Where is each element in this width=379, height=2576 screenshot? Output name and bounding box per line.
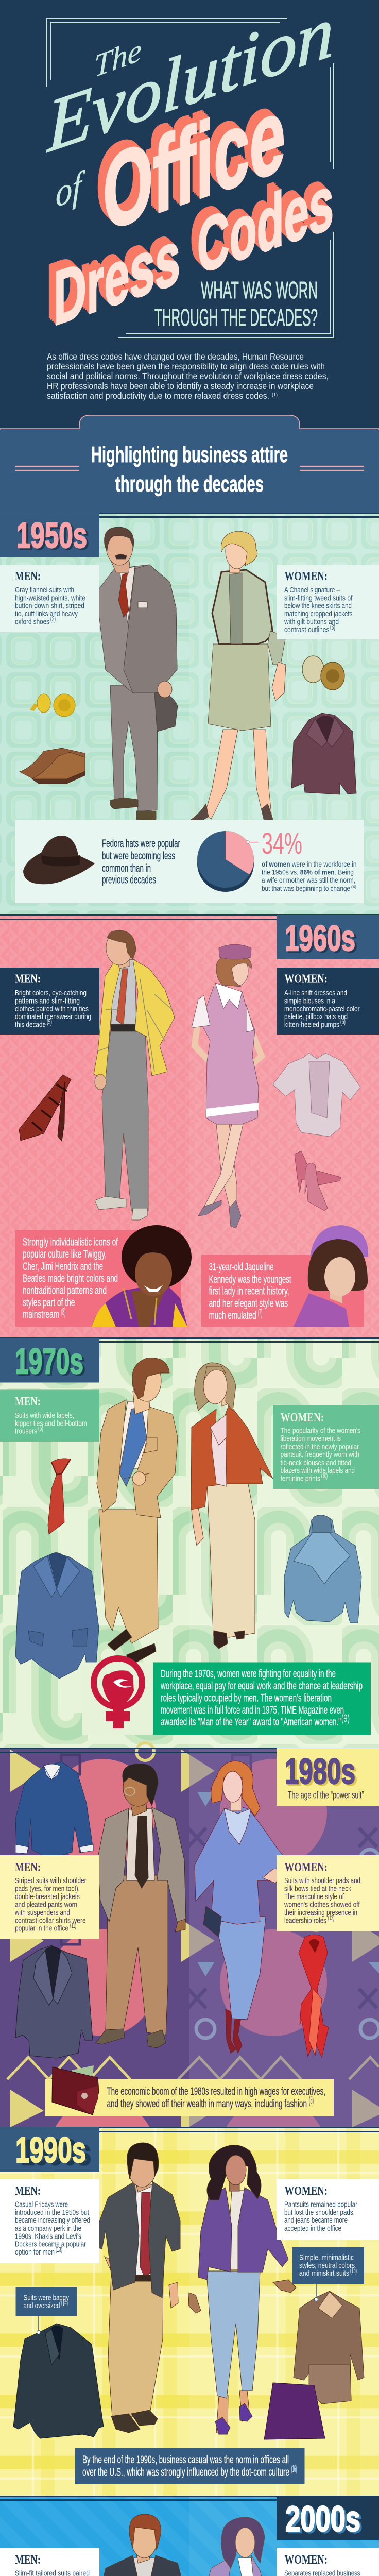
text: pop culture icons: mainstream — [23, 1309, 59, 1320]
intro paragraph: satisfaction and productivity due to more relaxed dress codes. — [47, 391, 269, 401]
text: men description: introduced in the 1950s but — [15, 2209, 89, 2217]
text: fedora note: previous decades — [102, 874, 156, 886]
callout: baggy suits — [15, 2287, 77, 2331]
text: men description: and pleated pants worn — [15, 1901, 77, 1909]
text: women description: feminine prints — [281, 1475, 320, 1483]
text: Jacqueline Kennedy: first lady in recent history, — [209, 1285, 289, 1297]
title: Dress — [46, 206, 180, 342]
text: men description: became increasingly offered — [15, 2216, 90, 2225]
text: women description: leadership roles — [284, 1917, 326, 1925]
heading: women: WOMEN: — [284, 1861, 328, 1874]
panel: economic boom callout — [45, 2065, 334, 2116]
text: women's liberation: (9) — [341, 1713, 350, 1724]
section: 2000s — [0, 2496, 379, 2576]
panel: women 1960s — [277, 968, 379, 1035]
text: men description: this decade — [15, 1021, 46, 1029]
text: Jacqueline Kennedy: (7) — [258, 1307, 262, 1319]
icon: chanel buttons — [302, 656, 344, 690]
text: Jacqueline Kennedy: much emulated — [209, 1310, 256, 1321]
text: women description: palette, pillbox hats and — [284, 1013, 348, 1021]
heading: highlighting — [91, 442, 288, 497]
decade label 1950s — [0, 513, 99, 557]
intro paragraph — [47, 351, 329, 401]
text: women description: blazers with wide lapels and — [281, 1467, 355, 1475]
figure: 1960s man — [94, 930, 175, 1220]
text: men description: option for men — [15, 2248, 55, 2257]
icon: white blouse — [273, 1053, 360, 1137]
text: women description: with gilt buttons and — [284, 618, 339, 626]
text: women description: liberation movement is — [281, 1435, 341, 1443]
icon: purple jacket — [291, 713, 356, 794]
text: men description: (13) — [56, 2246, 62, 2254]
icon: striped tie — [19, 1075, 71, 1141]
text: men description: Striped suits with shoulder — [15, 1877, 87, 1885]
section: 1960s — [0, 914, 379, 1338]
subtitle — [154, 277, 318, 331]
title: The Evolution of: of — [56, 162, 85, 216]
text: women description: The masculine style of — [284, 1893, 344, 1901]
heading: women: WOMEN: — [284, 2184, 328, 2198]
panel: men 1990s — [0, 2179, 99, 2263]
text: women description: matching cropped jackets — [284, 610, 352, 618]
text: men description: Casual Fridays were — [15, 2201, 68, 2209]
title: Dress: Dress — [53, 212, 179, 341]
text: men description — [15, 586, 85, 626]
text: women description: A Chanel signature – — [284, 586, 340, 595]
text: men description: Gray flannel suits with — [15, 586, 74, 595]
text: men description: as a company perk in the — [15, 2225, 81, 2233]
title: Dress: Dress — [48, 208, 175, 336]
title: Codes — [190, 151, 334, 291]
figure: 1980s man — [96, 1764, 186, 2048]
decade label 1990s: 1990s — [21, 2132, 91, 2173]
text: men description — [15, 2201, 90, 2257]
panel: men 1970s — [0, 1390, 99, 1442]
heading: men: MEN: — [15, 2553, 41, 2567]
text: women description — [281, 1427, 360, 1483]
title: Dress: Dress — [54, 213, 180, 342]
text: women description — [284, 989, 360, 1029]
decade label 1950s: 1950s — [16, 515, 87, 555]
text: women description — [284, 1877, 360, 1925]
panel: pop culture icons — [15, 1225, 192, 1327]
text: Jacqueline Kennedy — [209, 1261, 291, 1321]
text: women description: and jeans became more — [284, 2216, 348, 2225]
figure: 2000s woman — [198, 2517, 273, 2576]
callout: minimalist styles: and miniskirt suits — [299, 2269, 349, 2278]
decade label 1970s: 1970s — [15, 1341, 83, 1381]
heading: women: WOMEN: — [284, 570, 328, 583]
callout: baggy suits: Suits were baggy — [24, 2294, 70, 2302]
panel: men 1950s — [0, 565, 99, 632]
text: pop culture icons: Beatles made bright colors and — [23, 1273, 118, 1284]
text: economic boom: (8) — [309, 2095, 314, 2107]
icon: blue tie-neck blouse — [284, 1515, 361, 1623]
text: men description: clothes paired with thin ties — [15, 1005, 89, 1013]
text: men description: Dockers became a popular — [15, 2241, 86, 2249]
text: men description: pads (yes, for men too!), — [15, 1885, 80, 1893]
text: fedora note — [102, 838, 180, 886]
text: women description: (6) — [340, 1018, 346, 1026]
figure: 1950s man — [96, 527, 178, 823]
portrait: Jackie Kennedy — [294, 1225, 368, 1327]
icon: cufflinks — [30, 694, 75, 717]
text: men description: contrast-collar shirts were — [15, 1917, 86, 1925]
title: The Evolution of: The — [94, 31, 142, 84]
text: women description: Pantsuits remained popular — [284, 2201, 357, 2209]
panel: women 1980s — [277, 1855, 379, 1931]
callout: minimalist styles: Simple, minimalistic — [299, 2254, 354, 2262]
text: women description: their increasing presence in — [284, 1909, 357, 1917]
text: women workforce: a wife or mother was still the norm, — [262, 876, 355, 884]
heading: men: MEN: — [15, 570, 41, 583]
text: women description: accepted in the office — [284, 2225, 341, 2233]
icon: brogue shoes — [20, 748, 85, 784]
heading: men: MEN: — [15, 1861, 41, 1874]
text: men description: (5) — [47, 1018, 52, 1026]
section: 1990s — [0, 2127, 379, 2496]
panel: women 1990s — [277, 2179, 379, 2240]
icon: wallet — [52, 2065, 99, 2115]
icon: blue shirt — [15, 1762, 93, 1859]
panel: highlighting band — [0, 415, 379, 513]
panel: fedora and workforce facts — [15, 820, 364, 903]
text: men description: (2) — [50, 615, 56, 623]
figure: 1970s man — [97, 1358, 178, 1663]
panel: women's liberation callout — [82, 1658, 371, 1735]
text: women description: reflected in the newly popular — [281, 1443, 359, 1451]
text: men description: high-waisted paints, white — [15, 595, 85, 603]
heading: women: WOMEN: — [284, 973, 328, 986]
text: women description: (10) — [321, 1472, 328, 1480]
text: women description: women's clothes showed off — [284, 1901, 360, 1909]
heading: highlighting: through the decades — [115, 471, 264, 497]
text: economic boom — [107, 2086, 325, 2110]
text: fedora note: common than in — [102, 862, 151, 874]
text: pop culture icons: Cher, Jimi Hendrix and the — [23, 1261, 103, 1273]
heading: women: WOMEN: — [284, 2553, 328, 2567]
decade label 1950s: 1950s — [19, 517, 89, 557]
text: women's liberation — [160, 1668, 363, 1728]
text: men description — [15, 989, 91, 1029]
text: men description: trousers — [15, 1427, 37, 1435]
text: pop culture icons: nontraditional patterns and — [23, 1285, 107, 1297]
callout: baggy suits: and oversized — [24, 2302, 60, 2310]
icon: red kipper tie — [48, 1459, 71, 1534]
figure: 1960s woman — [192, 944, 262, 1228]
text: women workforce: of women were in the workforce in — [262, 860, 356, 868]
heading: men: MEN: — [15, 1395, 41, 1409]
text: women description: The popularity of the women's — [281, 1427, 360, 1435]
text: men description: Suits with wide lapels, — [15, 1412, 74, 1420]
icon: blue jacket — [15, 1553, 99, 1679]
text: Jacqueline Kennedy: Kennedy was the youngest — [209, 1274, 291, 1285]
text: women description: (3) — [330, 623, 335, 632]
text: men description: 1990s. Khakis and Levi's — [15, 2233, 81, 2241]
text: women workforce: the 1950s vs. 86% of men. Being — [262, 868, 354, 876]
panel: men 2000s — [0, 2548, 99, 2576]
text: men description: (5) — [38, 1425, 43, 1433]
text: women description: tie-neck blouses and fitted — [281, 1459, 351, 1467]
figure: 1990s woman — [188, 2145, 296, 2434]
heading: men: MEN: — [15, 2184, 41, 2198]
title: Dress: Dress — [49, 209, 176, 338]
heading: women: WOMEN: — [281, 1411, 324, 1425]
text: men description: double-breasted jackets — [15, 1893, 80, 1901]
figure: 1950s woman — [184, 531, 286, 823]
panel: business casual callout — [75, 2448, 305, 2484]
icon: brown skirt suit — [294, 2291, 364, 2404]
text: women description: kitten-heeled pumps — [284, 1021, 339, 1029]
text: women workforce: but that was beginning to change — [262, 884, 350, 892]
portrait: Jimi Hendrix — [92, 1225, 192, 1327]
icon: plaid double-breasted jacket — [15, 1945, 93, 2058]
text: women description: Suits with shoulder pads and — [284, 1877, 360, 1885]
text: Jacqueline Kennedy: and her elegant style was — [209, 1297, 288, 1310]
text: fedora note: but were becoming less — [102, 850, 175, 862]
text: men description: popular in the office — [15, 1925, 68, 1933]
text: men description: oxford shoes — [15, 618, 49, 626]
figure: 2000s man — [95, 2514, 188, 2576]
text: women description: pantsuit, frequently worn with — [281, 1451, 359, 1459]
text: pop culture icons: Strongly individualistic icons of — [23, 1236, 118, 1248]
text: women workforce: (4) — [351, 884, 356, 889]
icon: pink pumps — [295, 1151, 341, 1211]
panel: women 1950s — [277, 565, 379, 639]
figure: 1990s man — [93, 2143, 180, 2433]
decade label 1970s: 1970s — [17, 1343, 85, 1383]
section: 1980s — [0, 1743, 379, 2206]
text: men description: (11) — [70, 1922, 76, 1930]
title: Office — [96, 66, 285, 254]
text: men description — [15, 1412, 87, 1435]
icon: purple skirt — [264, 2383, 325, 2439]
title: Dress: Dress — [51, 211, 178, 340]
text: women description: silk bows tied at the neck — [284, 1885, 352, 1893]
text: men description: tie, cuff links and heavy — [15, 610, 78, 618]
decade label 1990s — [0, 2127, 99, 2173]
callout: minimalist styles: (15) — [350, 2267, 357, 2275]
text: men description: patterns and slim-fitting — [15, 997, 80, 1005]
panel: men 1980s — [0, 1855, 99, 1939]
text: pop culture icons: (8) — [61, 1306, 65, 1318]
text: women description — [284, 2201, 357, 2233]
text: women description: (12) — [328, 1914, 334, 1922]
section: 1950s — [0, 513, 379, 915]
intro paragraph: HR professionals have been able to identify a steady increase in workplace — [47, 381, 314, 391]
intro paragraph: As office dress codes have changed over the decades, Human Resource — [47, 351, 304, 362]
text: pop culture icons: styles part of the — [23, 1297, 75, 1309]
panel: title header — [0, 0, 379, 429]
text: men description: kipper ties and bell-bottom — [15, 1420, 87, 1428]
text: men description: dominated menswear during — [15, 1013, 91, 1021]
icon: fedora hat — [23, 836, 95, 884]
decade label 1980s — [277, 1748, 379, 1806]
text: men description: button-down shirt, striped — [15, 602, 84, 611]
text: fedora note: Fedora hats were popular — [102, 838, 180, 850]
text: men description: with suspenders and — [14, 1909, 70, 1917]
text: women description: contrast outlines — [284, 626, 330, 634]
text: women description: monochromatic-pastel color — [284, 1005, 360, 1013]
figure: 1970s woman — [191, 1363, 273, 1649]
panel: Jacqueline Kennedy — [201, 1225, 368, 1327]
panel: business casual callout: (16) — [291, 2463, 297, 2475]
text: women workforce — [262, 860, 356, 892]
text: pop culture icons — [23, 1236, 118, 1320]
panel: men 1960s — [0, 968, 99, 1035]
intro paragraph: social and political norms. Throughout the evolution of workplace dress codes, — [47, 371, 329, 381]
text: women description: simple blouses in a — [284, 997, 336, 1005]
stat: 34%: 34% — [262, 827, 302, 860]
section: 1970s — [0, 1337, 379, 1748]
text: women description: slim-fitting tweed suits of — [284, 595, 353, 603]
callout: minimalist styles — [292, 2247, 364, 2298]
pie chart: 34% women — [197, 831, 258, 892]
icon: women's liberation symbol — [94, 1658, 142, 1728]
text: men description — [14, 1877, 87, 1933]
panel: women 1970s — [273, 1405, 379, 1489]
decade label 1990s: 1990s — [15, 2130, 86, 2170]
title: Dress: Dress — [46, 206, 173, 335]
intro paragraph: professionals have been given the responsibility to align dress code rules with — [47, 361, 325, 371]
intro paragraph: (1) — [272, 392, 278, 397]
heading: men: MEN: — [15, 973, 41, 986]
text: Jacqueline Kennedy: 31-year-old Jaqueline — [209, 1261, 274, 1273]
icon: red silk scarf — [299, 1935, 329, 2057]
text: women description — [284, 586, 353, 634]
figure: 1980s woman — [195, 1761, 292, 2053]
icon: dark baggy jacket — [13, 2324, 104, 2438]
panel: women 2000s — [277, 2548, 379, 2576]
text: women description: below the knee skirts and — [284, 602, 352, 611]
decade label 1970s — [0, 1338, 99, 1383]
text: men description: Bright colors, eye-catching — [15, 989, 87, 997]
text: women description: A-line shift dresses and — [284, 989, 347, 997]
text: women description: but lost the shoulder pads, — [284, 2209, 355, 2217]
callout: baggy suits: (14) — [61, 2299, 68, 2308]
text: pop culture icons: popular culture like Twiggy, — [23, 1248, 107, 1260]
callout: minimalist styles: styles, neutral colors — [299, 2262, 355, 2270]
